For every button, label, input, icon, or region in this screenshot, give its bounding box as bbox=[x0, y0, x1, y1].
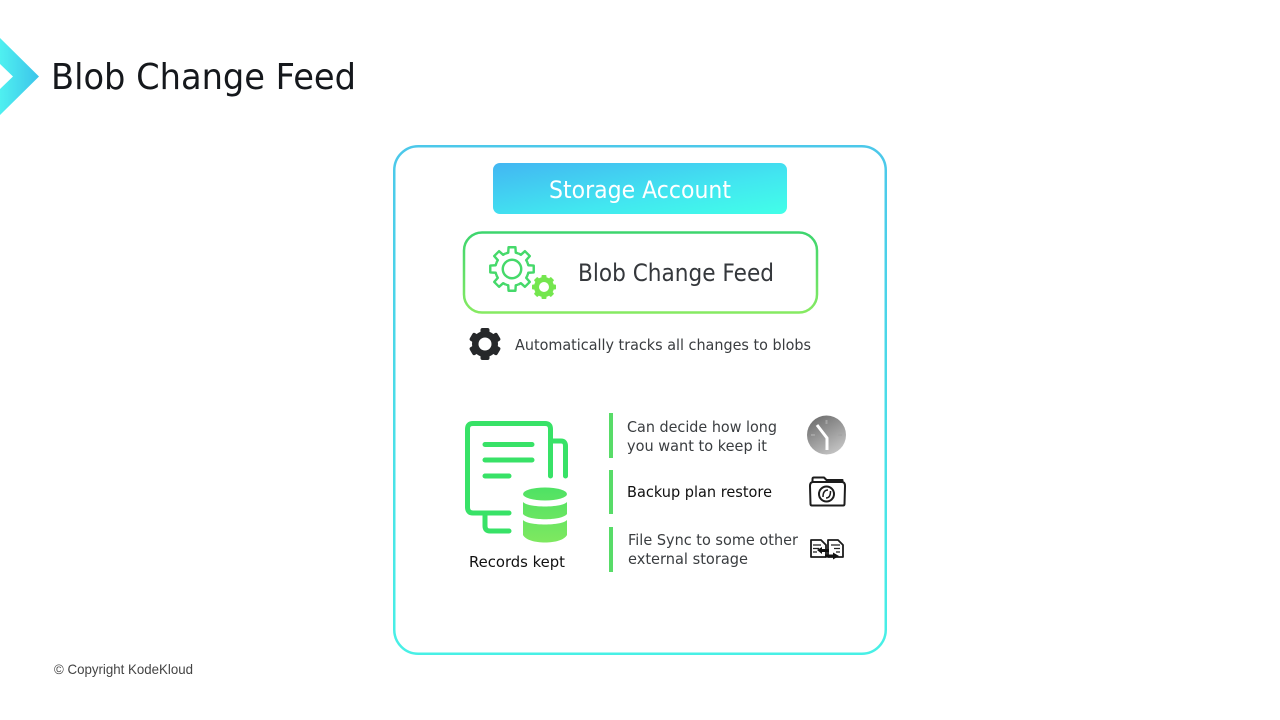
icon: dark gear bbox=[469, 328, 501, 360]
icon: documents with database bbox=[468, 424, 567, 542]
list: retention item: you want to keep it bbox=[627, 437, 767, 455]
storage account header: Storage Account bbox=[549, 176, 731, 204]
list: retention item: Can decide how long bbox=[627, 418, 777, 436]
automatic tracking note bbox=[469, 328, 811, 360]
storage account header bbox=[493, 163, 787, 214]
list: backup item bbox=[609, 470, 845, 514]
icon: small filled gear bbox=[532, 275, 556, 299]
title: Blob Change Feed bbox=[51, 57, 356, 98]
list: retention item bbox=[609, 413, 846, 458]
blob change feed label: Blob Change Feed bbox=[578, 259, 774, 287]
list: file sync item: File Sync to some other bbox=[628, 531, 799, 549]
panel: storage account bbox=[394, 146, 886, 654]
note text: Automatically tracks all changes to blobs bbox=[515, 336, 811, 354]
records kept label: Records kept bbox=[469, 553, 565, 571]
icon: folder bbox=[810, 478, 845, 506]
icon: file exchange bbox=[811, 540, 843, 560]
list: backup item: Backup plan restore bbox=[627, 483, 772, 501]
blob change feed box bbox=[464, 232, 817, 312]
icon: clock bbox=[807, 416, 846, 454]
list: file sync item: external storage bbox=[628, 550, 748, 568]
icon: large outline gear bbox=[490, 247, 534, 291]
icon: logo chevron bbox=[0, 38, 39, 115]
list: file sync item bbox=[609, 527, 843, 572]
copyright footer: © Copyright KodeKloud bbox=[54, 661, 193, 677]
